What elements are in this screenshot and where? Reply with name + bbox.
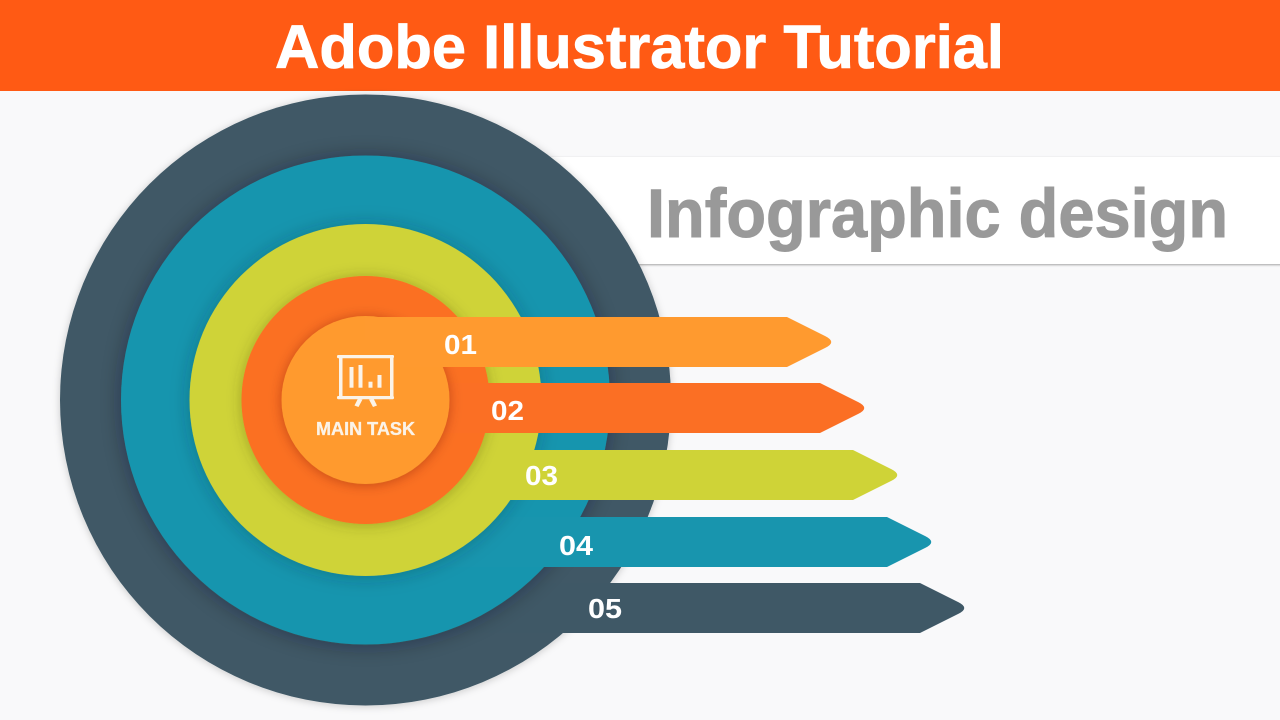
label 05: 05	[588, 593, 622, 624]
subtitle panel	[540, 157, 1280, 264]
subtitle text: Infographic design	[647, 175, 1228, 252]
label 04: 04	[559, 530, 593, 561]
ring 5: dark slate	[60, 94, 671, 706]
arrow bar 02	[365, 383, 864, 433]
ring 4: teal	[121, 156, 610, 644]
ring 3: lime	[190, 224, 542, 576]
label 01: 01	[444, 329, 477, 360]
label 03: 03	[525, 460, 558, 491]
icon: presentation board	[337, 355, 394, 407]
main task label: MAIN TASK	[316, 419, 415, 439]
label 02: 02	[491, 395, 524, 426]
center circle: main task	[282, 316, 450, 484]
arrow bar 05	[365, 583, 964, 633]
header banner	[0, 0, 1280, 91]
arrow bar 01	[365, 317, 831, 367]
title: Adobe Illustrator Tutorial	[275, 13, 1004, 81]
arrow bar 04	[365, 517, 931, 567]
ring 2: orange	[242, 276, 490, 524]
arrow bar 03	[365, 450, 897, 500]
